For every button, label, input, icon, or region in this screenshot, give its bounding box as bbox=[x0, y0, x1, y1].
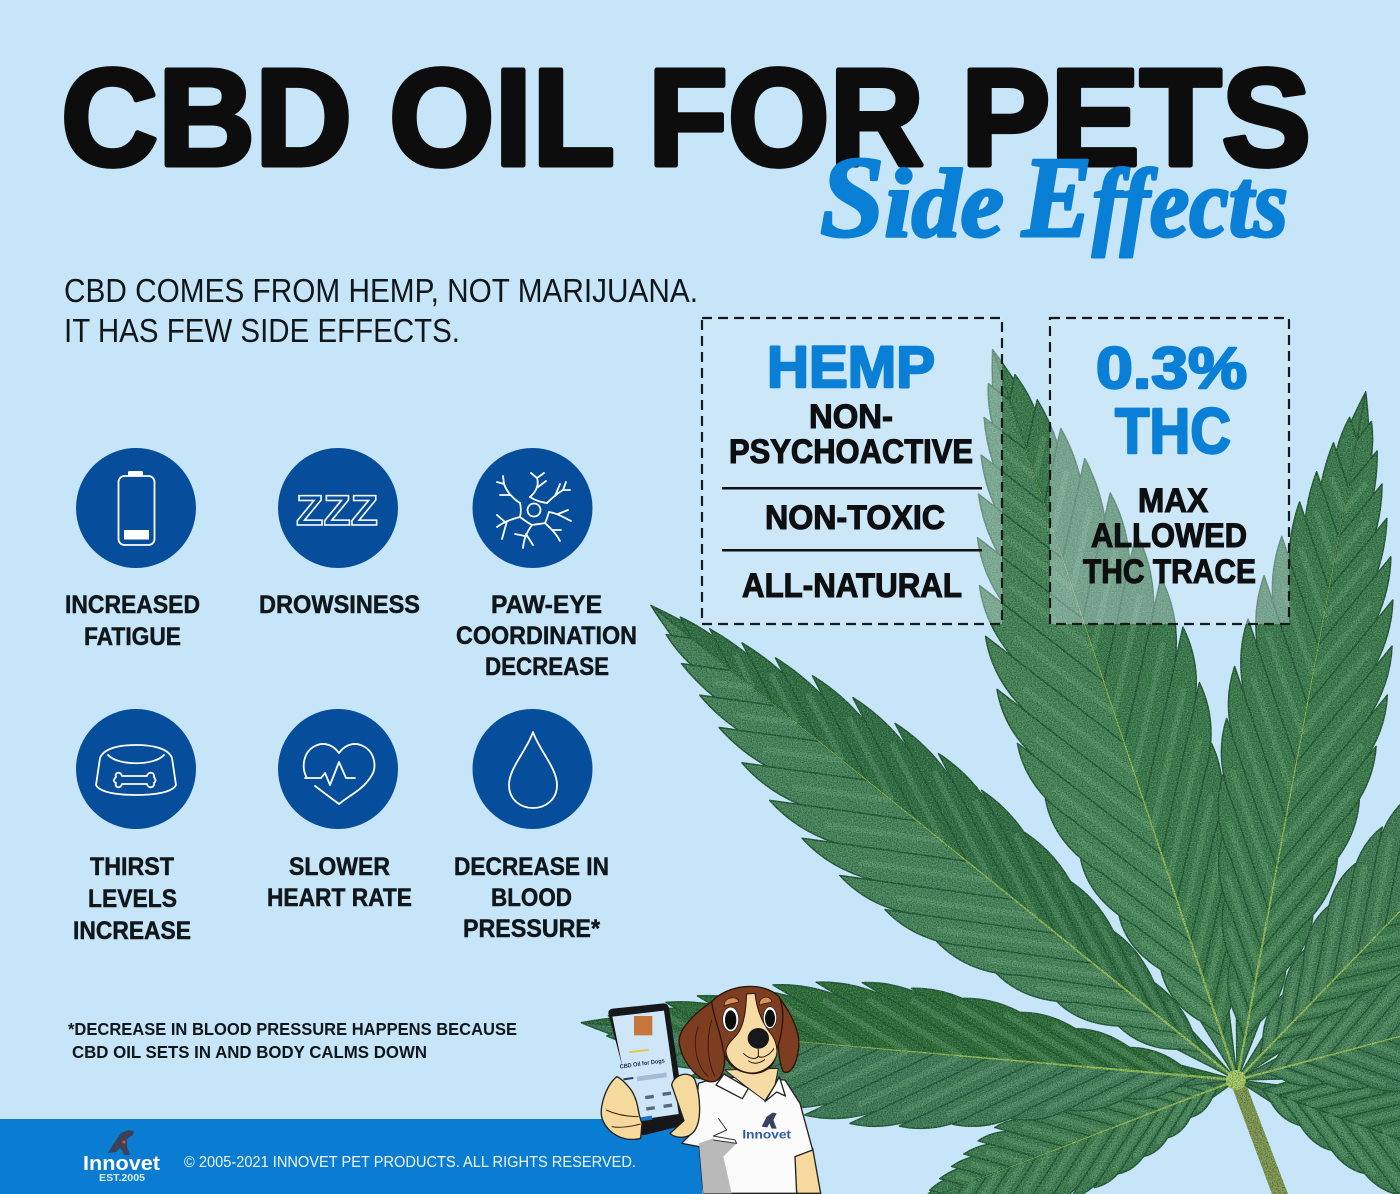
icon: drop bbox=[472, 709, 592, 829]
panel: side effect increased fatigue: INCREASED bbox=[65, 591, 200, 619]
product on screen bbox=[634, 1016, 652, 1035]
stem bbox=[1231, 1084, 1288, 1194]
panel: hemp facts box: NON-TOXIC bbox=[765, 499, 945, 537]
leaf centre glow bbox=[1226, 1070, 1246, 1090]
nose bbox=[748, 1028, 769, 1049]
panel: side effect increased fatigue bbox=[65, 448, 200, 651]
main title: CBD bbox=[61, 41, 352, 195]
panel: side effect thirst: INCREASE bbox=[73, 917, 191, 945]
icon: low battery bbox=[76, 448, 196, 568]
footnote: *DECREASE IN BLOOD PRESSURE HAPPENS BECAUSE bbox=[68, 1019, 517, 1039]
icon: ZZZ bbox=[278, 448, 398, 568]
muzzle and blaze bbox=[726, 993, 777, 1073]
leaflet: top centre bbox=[976, 349, 1236, 1072]
panel: side effect blood pressure bbox=[454, 709, 609, 943]
footnote bbox=[68, 1019, 517, 1062]
footer bar bbox=[0, 1119, 702, 1194]
panel: side effect drowsiness: DROWSINESS bbox=[259, 591, 420, 619]
panel: side effect coordination bbox=[456, 448, 637, 681]
shirt logo bbox=[742, 1113, 791, 1141]
shirt wrinkle bbox=[713, 1118, 737, 1143]
panel: side effect coordination: PAW-EYE bbox=[491, 591, 602, 619]
main title: OIL bbox=[389, 41, 615, 195]
panel: side effect heart rate bbox=[267, 709, 412, 912]
panel: hemp facts box: NON- bbox=[809, 398, 893, 436]
dog mascot holding phone bbox=[601, 986, 821, 1193]
leaflet: lower right bbox=[1244, 1080, 1400, 1194]
panel: side effect heart rate: HEART RATE bbox=[267, 884, 412, 912]
intro text: CBD COMES FROM HEMP, NOT MARIJUANA. bbox=[64, 272, 698, 309]
panel: side effect thirst bbox=[73, 709, 196, 945]
leaflet: long horizontal left bbox=[580, 981, 1227, 1130]
leaflet: upper left bbox=[650, 604, 1230, 1076]
panel: THC facts box bbox=[1050, 318, 1289, 624]
panel: THC facts box: MAX bbox=[1138, 482, 1208, 520]
main title bbox=[61, 41, 1311, 195]
collar bbox=[716, 1074, 785, 1102]
left ear bbox=[679, 1002, 725, 1082]
right thumb bbox=[670, 1074, 700, 1137]
leaflet: right upper bbox=[1241, 804, 1400, 1075]
neck bbox=[725, 1068, 778, 1101]
panel: THC facts box: 0.3% bbox=[1096, 336, 1247, 401]
footnote: CBD OIL SETS IN AND BODY CALMS DOWN bbox=[72, 1042, 427, 1062]
ear fold lines bbox=[695, 1020, 715, 1077]
intro text bbox=[64, 272, 698, 349]
left hand bbox=[601, 1077, 642, 1139]
panel: side effect heart rate: SLOWER bbox=[289, 853, 390, 881]
head bbox=[712, 986, 783, 1074]
panel: side effect coordination: DECREASE bbox=[485, 653, 609, 681]
shirt logo: Innovet bbox=[742, 1127, 791, 1141]
panel: THC facts box: THC bbox=[1115, 395, 1231, 467]
shirt shadow bbox=[699, 1137, 737, 1193]
panel: side effect thirst: LEVELS bbox=[88, 885, 177, 913]
footer logo bbox=[83, 1130, 160, 1184]
panel: hemp facts box: ALL-NATURAL bbox=[742, 567, 962, 605]
panel: side effect blood pressure: PRESSURE* bbox=[463, 915, 600, 943]
panel: side effect thirst: THIRST bbox=[90, 853, 174, 881]
icon: dog bowl bbox=[76, 709, 196, 829]
panel: side effect blood pressure: DECREASE IN bbox=[454, 853, 609, 881]
polo shirt bbox=[682, 1077, 813, 1193]
phone bbox=[608, 1003, 685, 1135]
panel: hemp facts box: PSYCHOACTIVE bbox=[729, 433, 973, 471]
footer logo: EST.2005 bbox=[99, 1172, 145, 1184]
panel: hemp facts box bbox=[702, 318, 1002, 624]
intro text: IT HAS FEW SIDE EFFECTS. bbox=[64, 312, 460, 349]
panel: side effect blood pressure: BLOOD bbox=[491, 884, 572, 912]
cannabis leaf illustration bbox=[575, 320, 1400, 1194]
icon: heart with pulse bbox=[278, 709, 398, 829]
panel: side effect increased fatigue: FATIGUE bbox=[84, 623, 181, 651]
finger lines bbox=[606, 1110, 641, 1127]
leaflet: right bbox=[1245, 973, 1400, 1092]
dog arm bbox=[793, 1148, 821, 1193]
mouth bbox=[743, 1048, 774, 1063]
right ear bbox=[777, 995, 799, 1072]
leaflet: top right bbox=[1217, 391, 1394, 1072]
phone screen bbox=[612, 1011, 679, 1121]
leaflet: lower left bbox=[927, 1082, 1229, 1194]
panel: THC facts box: THC TRACE bbox=[1083, 553, 1256, 591]
main title: FOR bbox=[648, 41, 924, 195]
main title: PETS bbox=[961, 41, 1311, 195]
icon: ZZZ: ZZZ bbox=[296, 487, 378, 535]
subtitle: Side Effects: Effects bbox=[1021, 134, 1288, 262]
phone: CBD Oil for Dogs bbox=[619, 1058, 666, 1071]
panel: hemp facts box: HEMP bbox=[767, 335, 935, 400]
icon: dog silhouette bbox=[108, 1130, 134, 1155]
copyright line: © 2005-2021 INNOVET PET PRODUCTS. ALL RIGHTS RESERVED. bbox=[184, 1154, 636, 1171]
icon: neuron bbox=[472, 448, 592, 568]
brows bbox=[724, 997, 772, 1006]
panel: side effect drowsiness bbox=[259, 448, 420, 619]
subtitle: Side Effects: Side bbox=[820, 134, 1004, 262]
subtitle: Side Effects bbox=[820, 134, 1288, 262]
panel: side effect coordination: COORDINATION bbox=[456, 622, 637, 650]
eyes bbox=[723, 1007, 777, 1032]
panel: THC facts box: ALLOWED bbox=[1091, 517, 1247, 555]
footer logo: Innovet bbox=[83, 1153, 160, 1175]
